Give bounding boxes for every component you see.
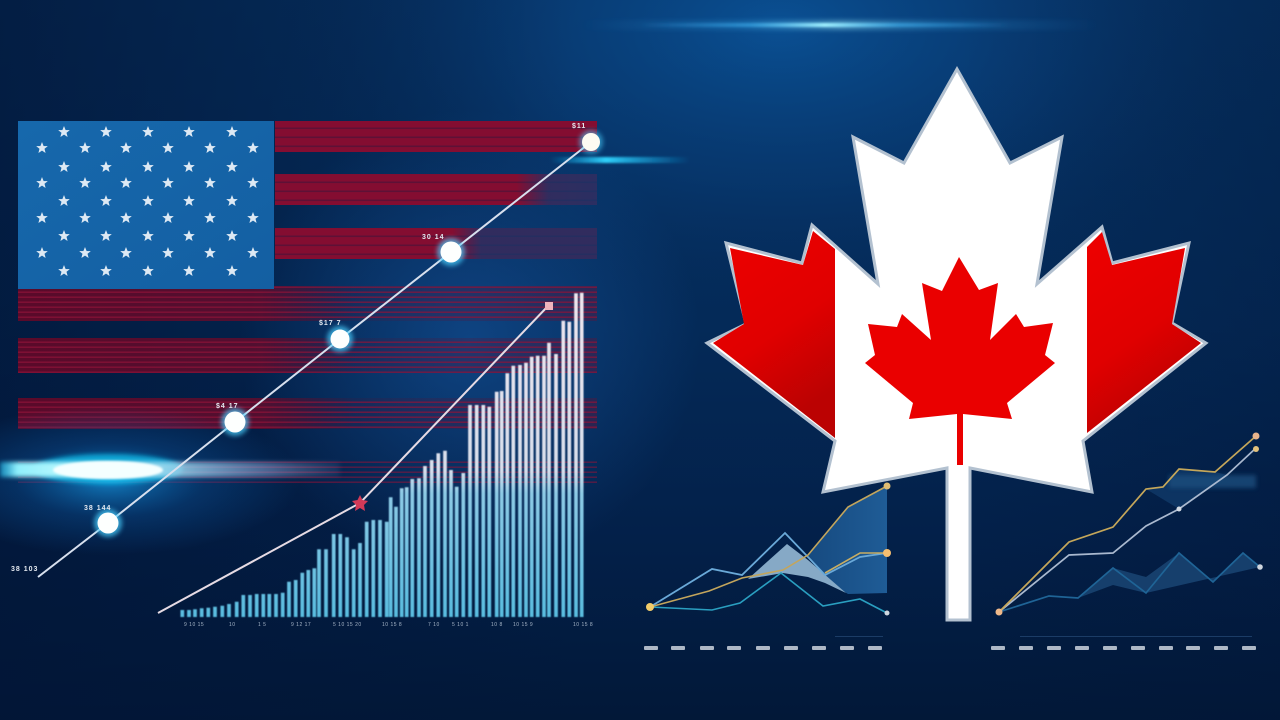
- leaf silhouette with stem: [707, 69, 1206, 620]
- node value labels: [11, 123, 586, 573]
- node 2: [221, 408, 249, 436]
- gold line second: [825, 553, 887, 573]
- bar chart axis labels: 1 5: [258, 622, 266, 628]
- top lens flare: [580, 20, 1100, 30]
- blue line: [999, 553, 1260, 612]
- node value labels: $4 17: [216, 403, 239, 410]
- bar chart axis labels: 10 15 8: [573, 622, 593, 628]
- node value labels: 38 144: [84, 505, 111, 512]
- start point: [646, 603, 654, 611]
- right chart axis dashes: [835, 636, 1256, 650]
- bar chart axis labels: 7 10: [428, 622, 440, 628]
- light area: [748, 544, 846, 593]
- bar chart axis labels: 9 10 15: [184, 622, 204, 628]
- bar chart axis labels: 5 10 15 20: [333, 622, 362, 628]
- bar chart axis labels: 10 15 9: [513, 622, 533, 628]
- bar chart axis labels: 5 10 1: [452, 622, 469, 628]
- faint bar: [1169, 475, 1256, 488]
- node value labels: 38 103: [11, 566, 38, 573]
- node 3: [327, 326, 353, 352]
- light blue line: [650, 533, 887, 607]
- lower shaded area: [1078, 553, 1260, 598]
- second trend line: [158, 302, 553, 613]
- gold line: [999, 436, 1256, 612]
- flag canton: [18, 121, 274, 289]
- right line chart: [996, 432, 1263, 616]
- node value labels: $11: [572, 123, 586, 130]
- shaded area: [808, 486, 887, 594]
- right red lobe: [1087, 232, 1201, 433]
- bar chart axis labels: 10: [229, 622, 236, 628]
- left chart axis dashes: [644, 646, 882, 650]
- node value labels: 30 14: [422, 234, 445, 241]
- Canadian maple leaf: [707, 69, 1206, 620]
- trend line with glowing nodes: [38, 130, 603, 577]
- node value labels: $17 7: [319, 320, 342, 327]
- upper band: [1146, 469, 1227, 509]
- left line chart: [646, 482, 891, 616]
- marker: upper: [545, 302, 553, 310]
- node 5: [579, 130, 603, 154]
- bar chart axis labels: 10 8: [491, 622, 503, 628]
- left red lobe: [713, 231, 835, 438]
- left lens flare: [0, 405, 340, 555]
- United States flag: [18, 121, 597, 486]
- bar chart: [182, 293, 582, 617]
- marker: lower: [352, 495, 368, 511]
- data points: [996, 432, 1263, 616]
- flag stars: [37, 127, 258, 275]
- teal line: [650, 573, 887, 613]
- flag stripes: [18, 121, 597, 486]
- central red maple leaf: [865, 257, 1055, 465]
- bar chart axis labels: 9 12 17: [291, 622, 311, 628]
- silver line: [999, 448, 1256, 612]
- gold line: [650, 486, 887, 607]
- bar chart axis labels: 10 15 8: [382, 622, 402, 628]
- bar chart axis labels: [184, 622, 593, 628]
- end points: [883, 482, 891, 616]
- node 1: [94, 509, 122, 537]
- side flare by top chart node: [550, 157, 690, 163]
- node 4: [437, 238, 465, 266]
